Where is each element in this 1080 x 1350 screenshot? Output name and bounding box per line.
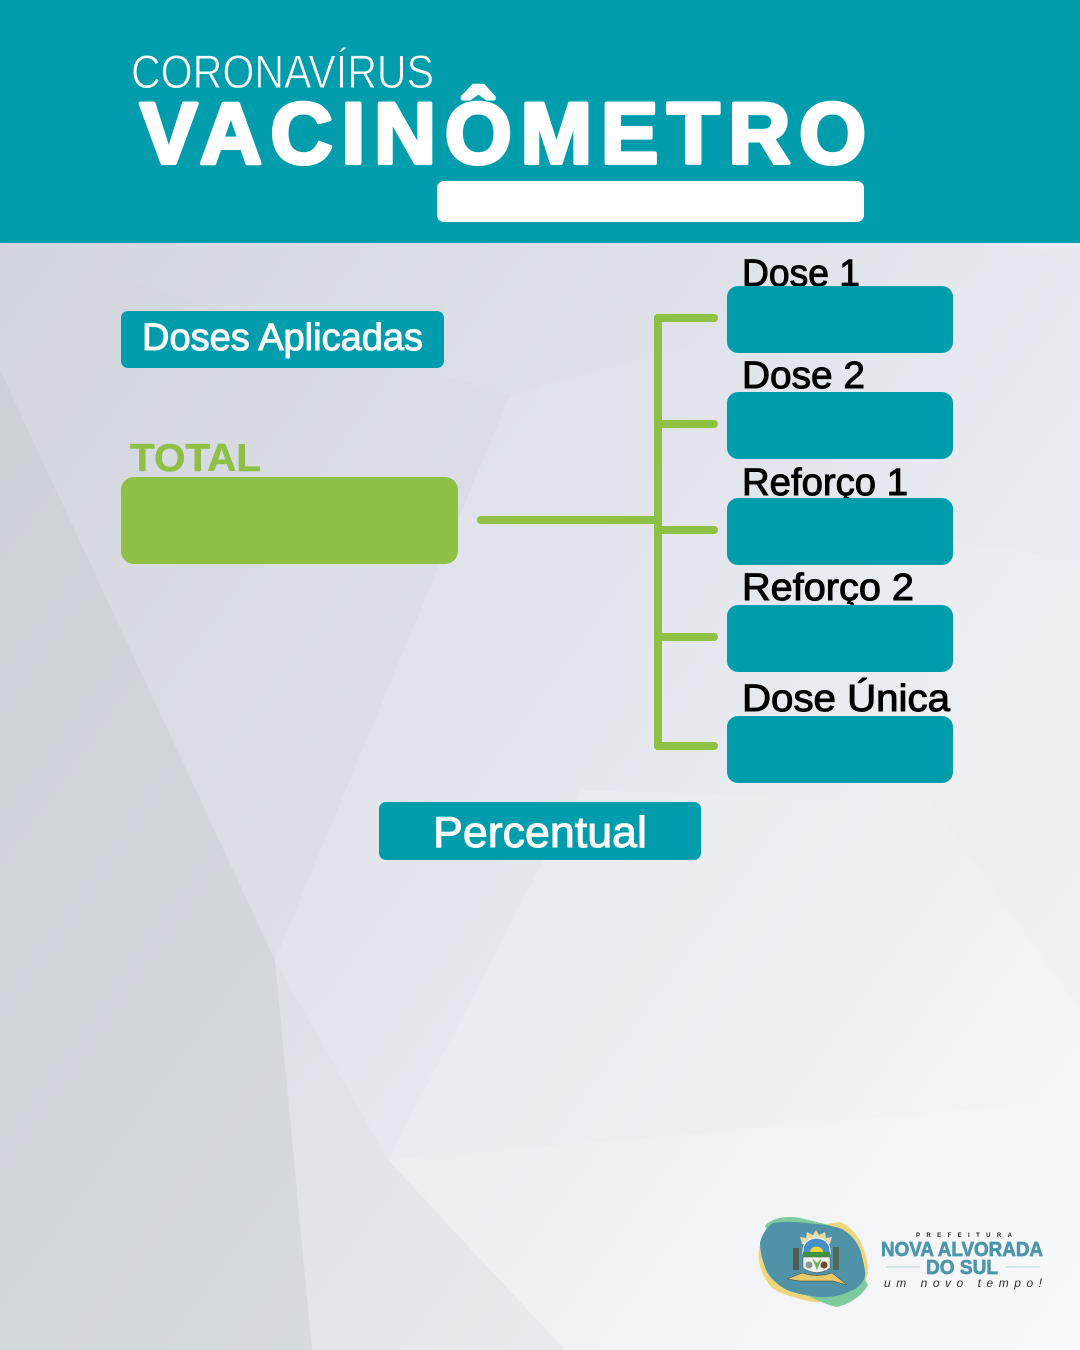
- white date box: [437, 181, 864, 222]
- reforço 1: Reforço 1: [742, 462, 908, 504]
- reforço 1: [727, 462, 953, 565]
- reforço 2: Reforço 2: [742, 567, 914, 609]
- title: CORONAVÍRUS: CORONAVÍRUS: [131, 45, 434, 98]
- dose 1: [727, 253, 953, 353]
- label: Doses Aplicadas: [121, 311, 444, 368]
- title: VACINÔMETRO: VACINÔMETRO: [140, 86, 866, 182]
- total panel: [121, 437, 458, 564]
- dose única: [727, 677, 953, 783]
- label: Percentual: [379, 802, 701, 860]
- dose única: Dose Única: [742, 677, 951, 720]
- icon: municipal crest on blobs: [759, 1217, 868, 1307]
- reforço 2: [727, 567, 953, 672]
- label: Percentual: Percentual: [433, 808, 647, 857]
- logo text: DO SUL: DO SUL: [926, 1257, 998, 1279]
- label: Doses Aplicadas: Doses Aplicadas: [142, 317, 423, 359]
- logo text: um novo tempo!: um novo tempo!: [884, 1276, 1043, 1290]
- logo text: PREFEITURA: PREFEITURA: [916, 1233, 1013, 1239]
- logo: Prefeitura de Nova Alvorada do Sul: [759, 1217, 1043, 1307]
- dose 2: Dose 2: [742, 355, 865, 397]
- header band: [0, 0, 1080, 243]
- connector tree: [481, 318, 714, 746]
- total panel: TOTAL: [130, 437, 261, 480]
- dose 1: Dose 1: [742, 253, 860, 295]
- dose 2: [727, 355, 953, 459]
- logo text: NOVA ALVORADA: NOVA ALVORADA: [881, 1239, 1043, 1261]
